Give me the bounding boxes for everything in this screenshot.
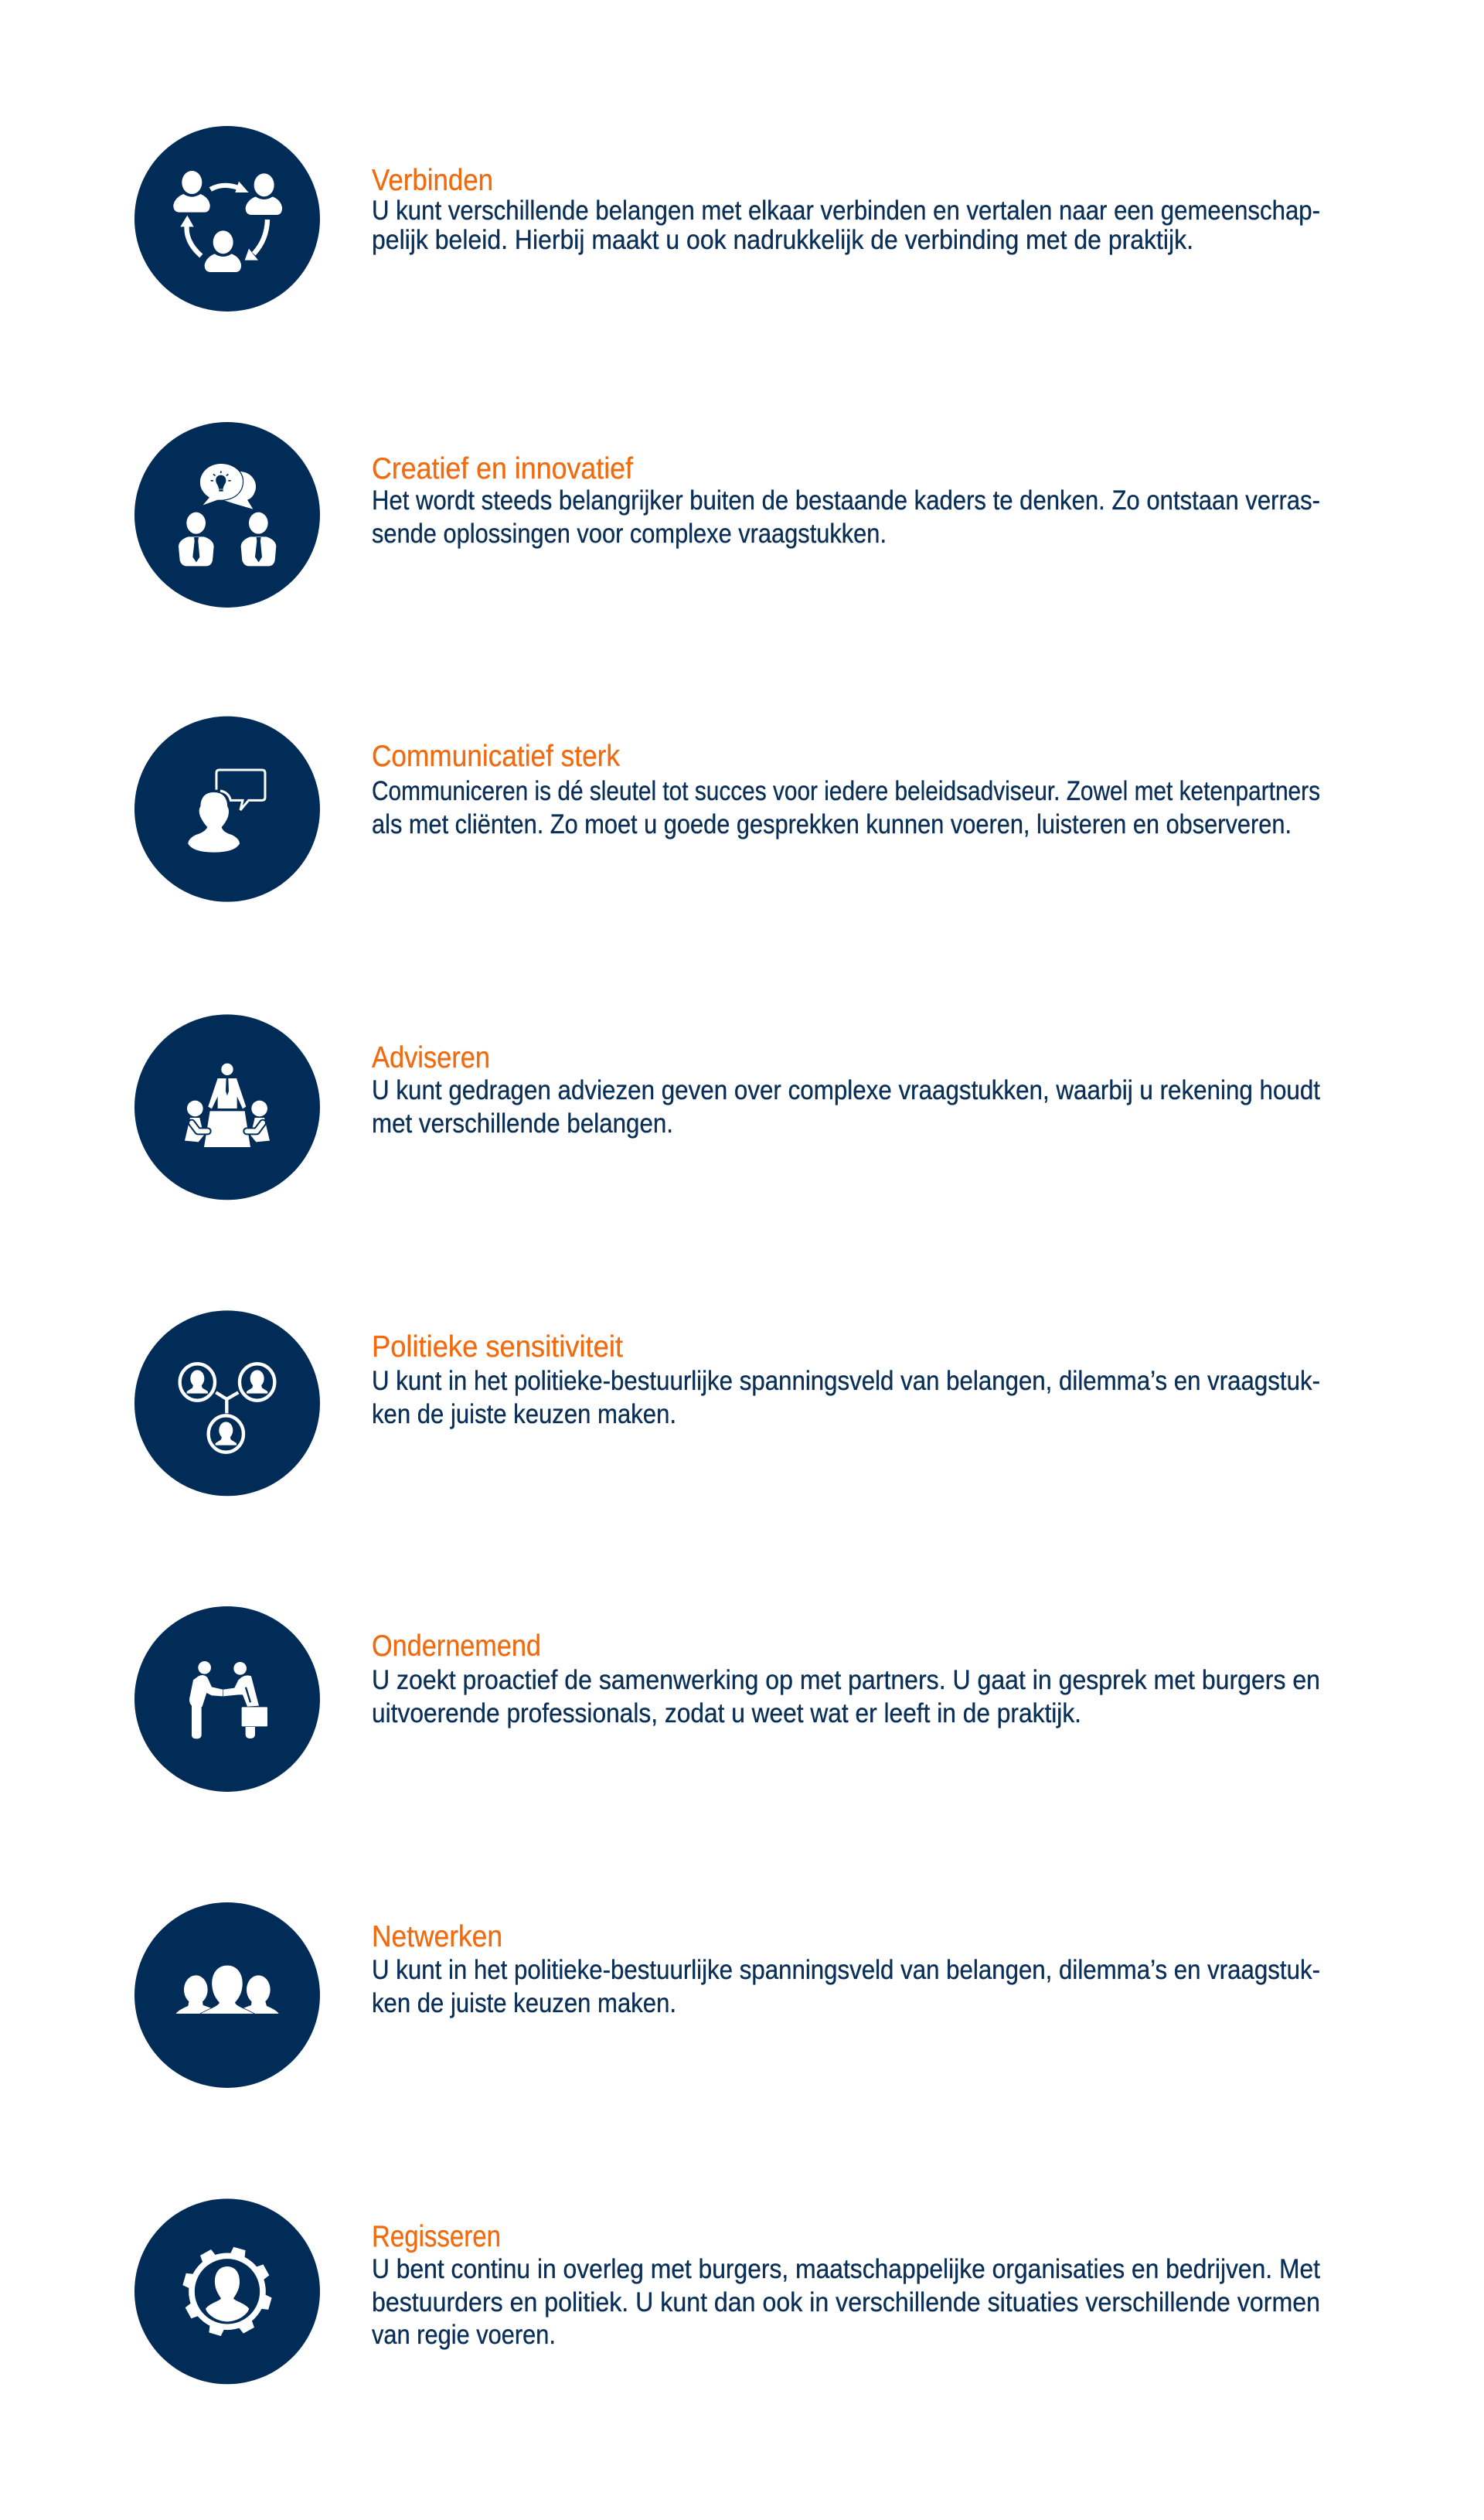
body text: U kunt in het politieke-bestuurlijke spanningsveld van belangen, dilemma’s en vraagstuk- [372,1955,1320,1985]
icon: three linked profile circles [134,1310,320,1496]
panel: Politieke sensitiviteit [134,1310,1320,1496]
icon: person inside a gear [134,2198,320,2384]
panel: Communicatief sterk [134,717,1320,902]
heading: Creatief en innovatief [372,452,633,485]
panel: Creatief en innovatief [134,422,1320,608]
body text: ken de juiste keuzen maken. [372,1988,676,2018]
body text: pelijk beleid. Hierbij maakt u ook nadrukkelijk de verbinding met de praktijk. [372,225,1193,255]
body text: Communiceren is dé sleutel tot succes voor iedere beleidsadviseur. Zowel met ketenpartners [372,776,1320,806]
panel: Adviseren [134,1014,1320,1200]
heading: Ondernemend [372,1629,541,1663]
body text: U kunt gedragen adviezen geven over complexe vraagstukken, waarbij u rekening houdt [372,1075,1320,1105]
body text [372,776,1320,839]
body text: Het wordt steeds belangrijker buiten de bestaande kaders te denken. Zo ontstaan verras- [372,485,1320,516]
body text [372,196,1320,255]
icon: person with speech bubble [134,717,320,902]
body text: U bent continu in overleg met burgers, maatschappelijke organisaties en bedrijven. Met [372,2254,1320,2284]
icon: handshake with briefcase [134,1606,320,1792]
icon: meeting around a table [134,1014,320,1200]
body text [372,1075,1320,1139]
icon: group of three people [134,1902,320,2088]
body text: sende oplossingen voor complexe vraagstukken. [372,519,887,549]
panel: Verbinden [134,126,1320,312]
heading: Communicatief sterk [372,740,620,773]
body text: ken de juiste keuzen maken. [372,1399,676,1429]
body text [372,1665,1320,1728]
heading: Netwerken [372,1920,502,1953]
body text [372,1366,1320,1429]
body text: U kunt in het politieke-bestuurlijke spanningsveld van belangen, dilemma’s en vraagstuk- [372,1366,1320,1396]
body text [372,2254,1320,2350]
heading: Verbinden [372,164,493,197]
icon: two people sharing an idea in speech bubbles [134,422,320,608]
body text: U kunt verschillende belangen met elkaar verbinden en vertalen naar een gemeenschap- [372,196,1320,226]
body text [372,485,1320,549]
heading: Politieke sensitiviteit [372,1330,623,1364]
body text: bestuurders en politiek. U kunt dan ook in verschillende situaties verschillende vormen [372,2287,1320,2317]
icon: three people connected by circular arrows [134,126,320,312]
body text: U zoekt proactief de samenwerking op met partners. U gaat in gesprek met burgers en [372,1665,1320,1695]
heading: Regisseren [372,2220,501,2253]
body text: als met cliënten. Zo moet u goede gesprekken kunnen voeren, luisteren en observeren. [372,809,1292,839]
panel: Regisseren [134,2198,1320,2384]
panel: Netwerken [134,1902,1320,2088]
body text: van regie voeren. [372,2320,556,2350]
heading: Adviseren [372,1041,490,1074]
body text: uitvoerende professionals, zodat u weet wat er leeft in de praktijk. [372,1698,1081,1728]
body text [372,1955,1320,2018]
body text: met verschillende belangen. [372,1108,673,1139]
panel: Ondernemend [134,1606,1320,1792]
